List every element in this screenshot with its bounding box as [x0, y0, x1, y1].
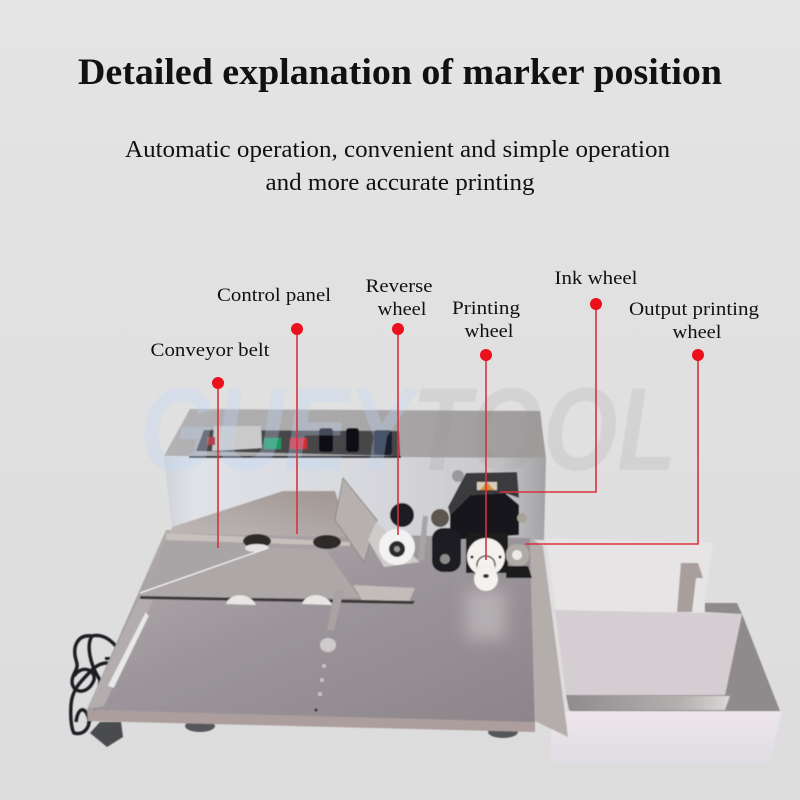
upper tray	[170, 491, 350, 537]
callout: ink wheel: Ink wheel	[554, 268, 638, 289]
control panel	[189, 426, 401, 458]
feet	[185, 720, 215, 732]
watermark: TOOL	[412, 364, 676, 496]
output base top	[567, 603, 780, 711]
power cord and plug	[71, 635, 130, 747]
guide post	[418, 516, 428, 560]
callout: reverse wheel	[366, 276, 432, 535]
output roller	[506, 544, 529, 566]
callout: output printing wheel	[525, 299, 760, 544]
subtitle: and more accurate printing	[266, 169, 534, 196]
output tray rear panel	[546, 538, 713, 612]
output base front	[550, 712, 782, 763]
callout: control panel	[217, 285, 331, 534]
upper wheels	[243, 534, 271, 548]
scale holes	[314, 664, 326, 712]
lower half-moon wheels	[226, 595, 256, 605]
product photo: marking machine	[71, 409, 782, 763]
callout: conveyor belt: Conveyor belt	[150, 340, 270, 361]
callout: control panel: Control panel	[217, 285, 331, 306]
lower tray	[140, 548, 360, 598]
output tray front panel	[555, 610, 742, 695]
callout: printing wheel	[452, 298, 521, 560]
title: Detailed explanation of marker position	[78, 52, 722, 93]
back housing front face	[164, 457, 546, 540]
callout: output printing wheel: Output printing	[629, 299, 760, 320]
reverse wheel	[379, 529, 415, 565]
bracket flap	[335, 478, 377, 562]
callout: printing wheel: Printing	[452, 298, 521, 319]
dark roller behind reverse wheel	[390, 503, 414, 527]
callout: output printing wheel: wheel	[672, 322, 722, 343]
watermark	[140, 364, 676, 496]
belt to reverse wheel	[368, 522, 420, 567]
printing wheel	[467, 538, 505, 591]
main table plate	[87, 530, 535, 723]
side clamp	[327, 590, 344, 630]
callout: reverse wheel: wheel	[378, 299, 426, 320]
ink head	[448, 470, 527, 540]
upper rail	[166, 533, 350, 546]
callout: printing wheel: wheel	[464, 321, 514, 342]
black rubber roller	[432, 528, 532, 578]
back housing top face	[164, 409, 546, 458]
callout: conveyor belt	[150, 340, 270, 548]
transfer roller	[431, 509, 449, 527]
output tray hook	[677, 563, 703, 612]
serrated strip	[353, 585, 415, 602]
watermark: GUEY	[140, 364, 420, 496]
table front edge	[87, 710, 535, 732]
lower rail	[140, 596, 415, 604]
subtitle: Automatic operation, convenient and simple operation	[125, 136, 670, 163]
table left strip	[87, 596, 155, 709]
callout: reverse wheel: Reverse	[366, 276, 432, 297]
table right fold	[530, 538, 568, 737]
left guide tray	[145, 533, 262, 595]
callout: ink wheel	[500, 268, 638, 492]
subtitle	[125, 136, 670, 196]
reflection under wheels	[466, 590, 506, 640]
output tray shiny strip	[566, 695, 730, 710]
